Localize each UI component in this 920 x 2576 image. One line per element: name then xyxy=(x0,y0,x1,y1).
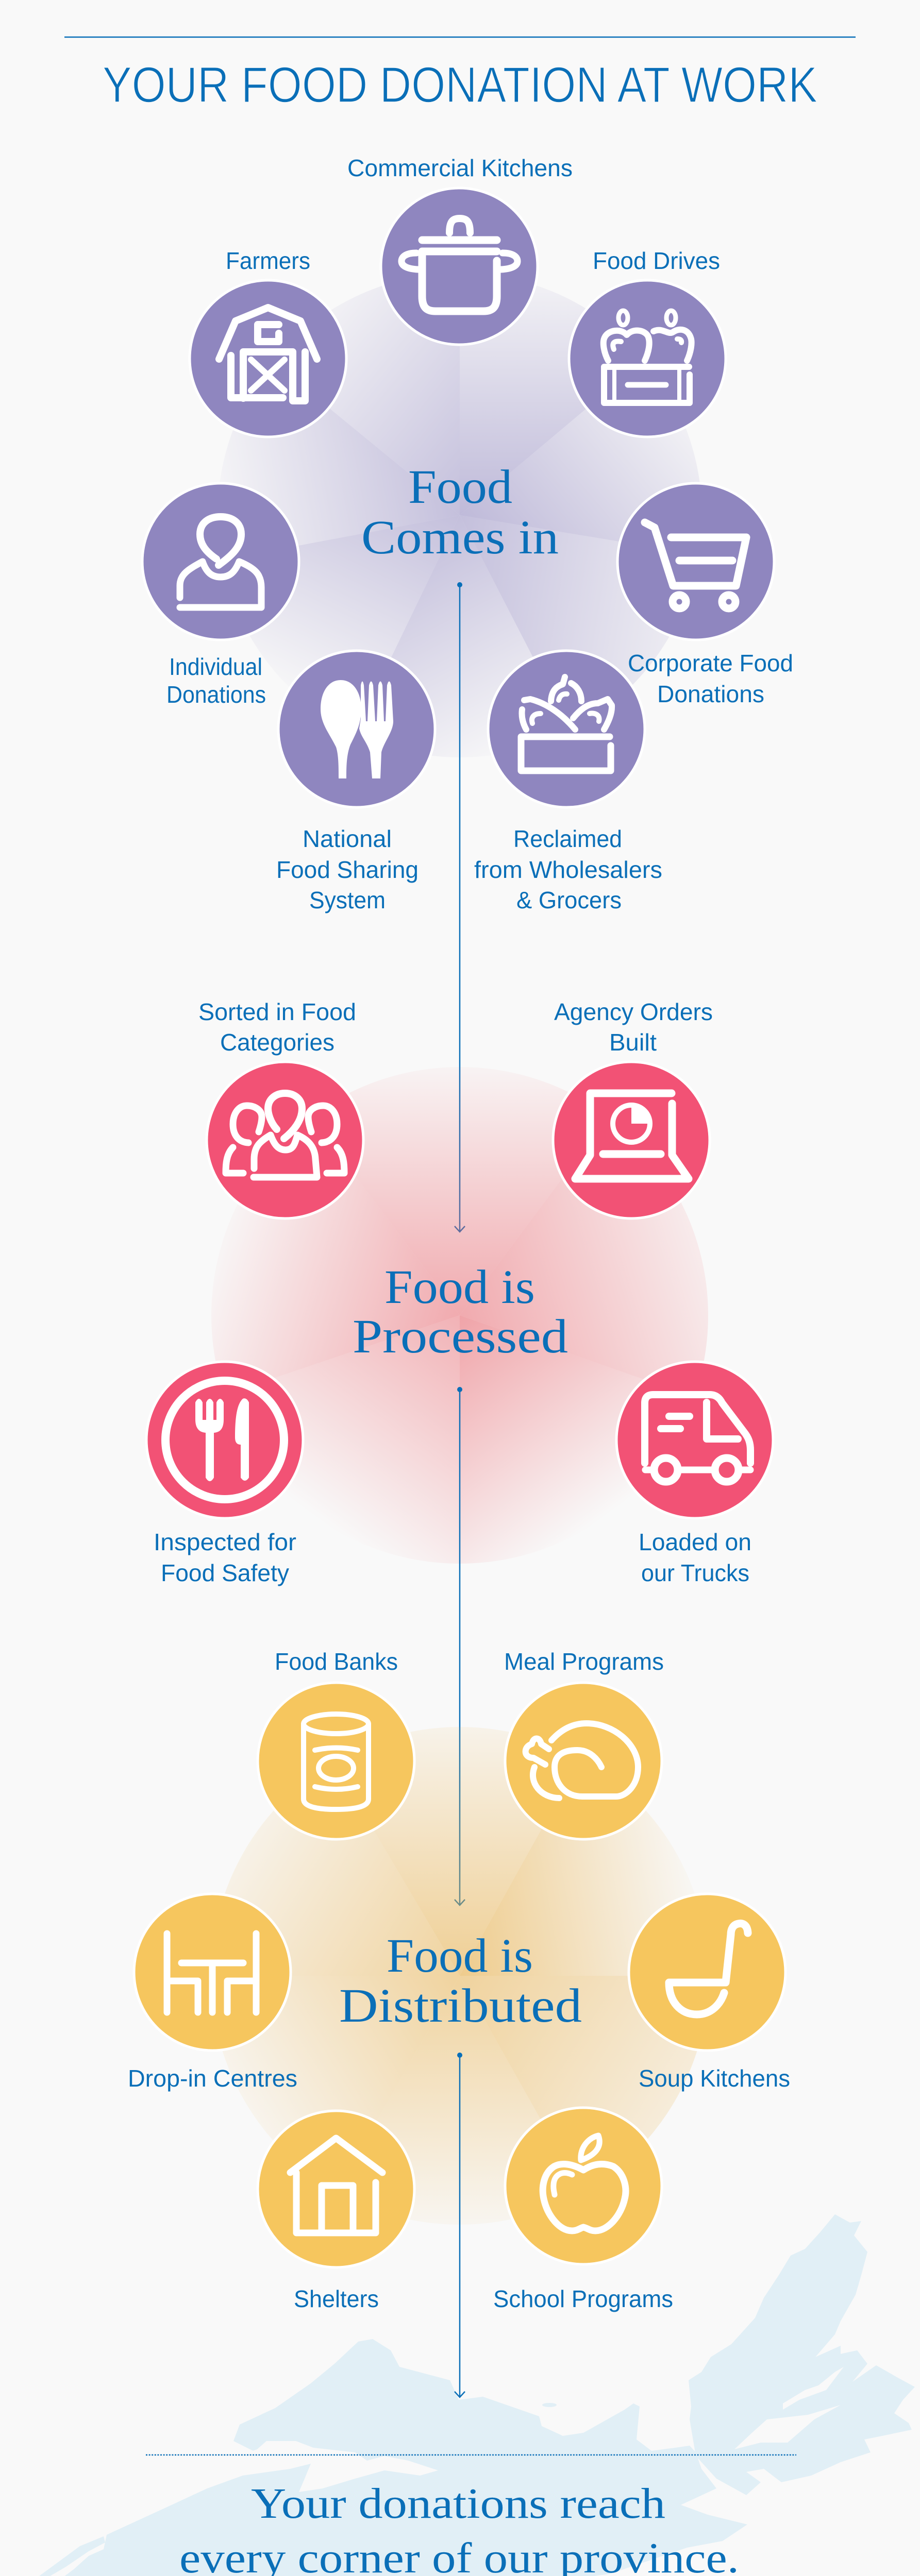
purple radial burst xyxy=(227,285,700,756)
text: your donations reach every corner: Your donations reach xyxy=(251,2480,665,2528)
label xyxy=(639,1529,751,1586)
panel: food is distributed xyxy=(99,1648,821,2312)
label: Individual xyxy=(169,653,262,680)
heading: food is distributed xyxy=(339,1929,582,2032)
label: from Wholesalers xyxy=(474,856,662,883)
label: Food Sharing xyxy=(276,856,419,883)
node: drop-in centres xyxy=(128,1894,297,2092)
heading: food is processed: Processed xyxy=(353,1310,568,1363)
heading: food is processed xyxy=(353,1261,568,1363)
label: Food Drives xyxy=(593,247,720,274)
icon: ladle xyxy=(669,1923,748,2014)
heading: food comes in xyxy=(361,461,559,564)
label xyxy=(198,998,356,1056)
label: & Grocers xyxy=(516,887,622,913)
label: Categories xyxy=(220,1029,334,1056)
label: Agency Orders xyxy=(554,998,713,1025)
label: Donations xyxy=(657,681,764,707)
title: YOUR FOOD DONATION AT WORK xyxy=(103,57,817,113)
icon: pot xyxy=(402,218,517,311)
label: Loaded on xyxy=(639,1529,751,1555)
icon: barn xyxy=(219,308,317,401)
label: Built xyxy=(609,1029,657,1056)
label: Sorted in Food xyxy=(198,998,356,1025)
icon: cart xyxy=(645,522,746,608)
label xyxy=(276,825,419,913)
label xyxy=(554,998,713,1056)
heading: food is distributed: Distributed xyxy=(339,1979,582,2032)
node: reclaimed from wholesalers and grocers xyxy=(474,651,662,913)
icon: plate with fork and knife xyxy=(165,1381,284,1499)
label: Shelters xyxy=(294,2285,379,2312)
label: Inspected for xyxy=(154,1529,296,1555)
icon: person xyxy=(180,517,261,607)
label: our Trucks xyxy=(641,1560,749,1586)
label xyxy=(154,1529,296,1586)
icon: table and chairs xyxy=(167,1934,256,2012)
icon: delivery truck xyxy=(645,1395,750,1482)
node: school programs xyxy=(493,2108,673,2312)
node: agency orders built xyxy=(553,998,713,1218)
icon: people group xyxy=(226,1093,344,1177)
node: meal programs xyxy=(504,1648,664,1839)
label xyxy=(166,653,266,708)
label: Food Banks xyxy=(275,1648,398,1675)
node: national food sharing system xyxy=(276,651,435,913)
node: food drives xyxy=(569,247,726,437)
label: Commercial Kitchens xyxy=(347,155,573,181)
label: School Programs xyxy=(493,2285,673,2312)
icon: vegetable box xyxy=(521,677,612,771)
label: Farmers xyxy=(226,247,310,274)
label: Corporate Food xyxy=(628,650,793,676)
icon: apple xyxy=(543,2136,626,2231)
arrow: distributed to province xyxy=(455,2053,465,2397)
top rule xyxy=(64,37,856,38)
arrow: comes in to processed xyxy=(455,582,465,1232)
node: loaded on our trucks xyxy=(616,1362,773,1586)
icon: can xyxy=(304,1714,369,1809)
node: commercial kitchens xyxy=(347,155,573,345)
icon: spoon and fork xyxy=(321,680,393,778)
heading: food comes in: Food xyxy=(408,461,512,514)
node: shelters xyxy=(258,2111,414,2312)
heading: food is processed: Food is xyxy=(384,1261,535,1314)
icon: turkey xyxy=(526,1723,638,1798)
icon: house xyxy=(290,2138,382,2233)
node: inspected for food safety xyxy=(146,1362,303,1586)
label: National xyxy=(303,825,392,852)
label: Soup Kitchens xyxy=(639,2065,790,2092)
label: System xyxy=(309,887,386,913)
pink radial burst xyxy=(211,1067,708,1564)
node: food banks xyxy=(258,1648,414,1839)
yellow radial burst xyxy=(223,1727,697,2225)
panel: food is processed xyxy=(147,1003,772,1586)
label: Meal Programs xyxy=(504,1648,664,1675)
icon: food crate xyxy=(604,311,692,403)
node: soup kitchens xyxy=(629,1894,790,2092)
node: sorted in food categories xyxy=(198,998,363,1218)
label xyxy=(474,825,662,913)
icon: laptop with chart xyxy=(575,1093,689,1179)
node: corporate food donations xyxy=(617,483,793,707)
arrow: processed to distributed xyxy=(455,1387,465,1905)
label: Reclaimed xyxy=(513,825,622,852)
node: farmers xyxy=(190,247,346,437)
map of Nova Scotia background xyxy=(7,2214,915,2576)
label: Drop-in Centres xyxy=(128,2065,297,2092)
label xyxy=(628,650,793,707)
text: your donations reach every corner xyxy=(179,2480,739,2576)
panel: food comes in xyxy=(105,155,816,913)
node: individual donations xyxy=(142,483,299,708)
label: Donations xyxy=(166,681,266,708)
label: Food Safety xyxy=(161,1560,289,1586)
heading: food is distributed: Food is xyxy=(387,1929,533,1982)
heading: food comes in: Comes in xyxy=(361,511,559,564)
